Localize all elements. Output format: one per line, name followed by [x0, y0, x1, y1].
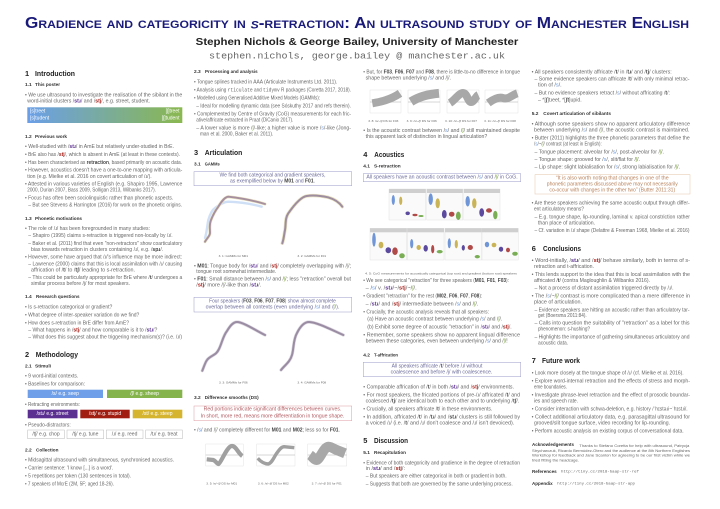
captions: figures 1 and 2: 3. 2: GAMMs for F01 — [297, 254, 326, 258]
subsection: 1.2 Previous work: • Focus has often been sociolinguistic rather than phonetic aspects. — [25, 195, 173, 201]
heading: Methodology: Methodology — [36, 350, 79, 359]
captions: figures 5 to 7: 3. 6: /s/~/ʃ/ DS for M02 — [258, 481, 289, 485]
text: affrication discussion: – *[ʃ]tɹeet, *[ʃt]upid. — [538, 97, 582, 103]
text: articulatory means: – Cf. variation in /ɹ/ shape (Delattre & Freeman 1968, Mielke et al. 2016) — [534, 228, 690, 234]
chart: GAMMs for F01 — [282, 196, 342, 243]
text: s-retraction findings: • Remember, some speakers show no apparent lingual difference — [363, 332, 520, 338]
text: conclusions: – Highlights the importance of gathering simultaneous articulatory and — [534, 334, 690, 340]
callout: Butter quotation — [535, 175, 690, 194]
subsection heading: 3.1 GAMMs — [194, 162, 220, 168]
section: 7 Future work — [532, 356, 690, 434]
text: conclusions — [532, 258, 690, 346]
text: conclusions: get (Boersma 2011:84). — [538, 313, 587, 319]
subsection heading: 3.2 Difference smooths — [194, 395, 259, 401]
authors: Stephen Nichols & George Bailey, University of Manchester — [196, 36, 518, 48]
text: articulatory means: ent articulatory means? — [534, 207, 584, 213]
heading: Conclusions — [532, 244, 581, 253]
subsection: 2.3 Processing and analysis: – A lower value is more / ʃ/-like; a higher value is more / s/-like (Jong- — [196, 125, 351, 131]
gradient box: street and student variants: [s]tudent — [30, 115, 50, 121]
text: conclusions: • The /s/~/ʃ/ contrast is more complicated than a mere difference in — [532, 294, 690, 300]
callout: four speakers overlap: Four speakers (F03, F06, F07, F08) show almost complete — [209, 298, 336, 304]
text: future work: • Investigate phrase-level retraction and the effect of prosodic boundar- — [532, 392, 690, 398]
captions: figures 1 and 2: 3. 1: GAMMs for M01 — [219, 254, 248, 258]
text: M01 and F01 observations: • F01: Small distance between / s/ and /ʃ/; less "retraction" overall but — [194, 276, 352, 282]
text: retracting environments: • Retracting environments: — [25, 402, 80, 408]
text: little difference for four speakers: • But, for F03, F06, F07 and F08, there is little-to-no difference in tongue — [363, 69, 520, 75]
text: affrication discussion: – But no evidence speakers retract / s/ without affricating / t/: — [534, 91, 670, 97]
title: Gradience and categoricity in s-retraction: An ultrasound study of Manchester English — [25, 15, 689, 32]
subsection: 1.4 Research questions: • Is s-retraction categorical or gradient? — [25, 304, 113, 310]
callout: categorical and gradient speakers — [194, 172, 352, 186]
subsection: 5.2 Covert articulation of sibilants: – Lip shape: slight labialisation for / s/, strong labialisation for / ʃ/. — [534, 165, 680, 171]
subsection: 5.2 Covert articulation of sibilants: • Although some speakers show no apparent articulatory difference — [532, 121, 690, 127]
text: t-affrication findings — [363, 384, 521, 426]
section: 4 Acoustics — [363, 150, 521, 426]
text: articulatory means: – E.g. tongue shape, lip-rounding, laminal v. apical constriction rather — [534, 214, 690, 220]
chart: difference smooth F01 — [308, 444, 347, 466]
text: s-retraction findings: (b) Exhibit some degree of acoustic "retraction" in / stɹ/ and /stj/. — [367, 325, 512, 331]
appendix: http://tiny.cc/2018-baap-str-app — [557, 481, 636, 486]
text: conclusions: • This lends support to the idea that this is local assimilation with the — [532, 272, 690, 278]
subsection: 1.1 This poster: word-initial clusters / stɹ/ and /stj/, e.g. street, student. — [27, 99, 150, 105]
captions: figures 1 and 2 — [219, 254, 326, 258]
chart: difference smooth M02 — [257, 444, 295, 466]
text: affrication discussion: tion of / s/. — [538, 83, 562, 89]
subsection: 1.3 Phonetic motivations: similar process before /j/ for most speakers. — [31, 281, 130, 287]
text: little difference for four speakers — [363, 69, 520, 81]
retracting environment boxes: /st/ e.g. steep — [142, 411, 173, 417]
text: M01 and F01 observations: /stj/ more / ʃ/-like than / stɹ/. — [196, 283, 261, 289]
subsection heading: 4.2 T-affrication: T-affrication — [374, 352, 398, 358]
heading: Methodology: 2 — [25, 350, 29, 359]
text: articulatory means: • Are these speakers achieving the same acoustic output through differ- — [532, 201, 690, 207]
chart: difference smooth M01 — [206, 444, 243, 466]
subsection: 2.2 Collection: Collection — [36, 448, 59, 454]
text: acoustic contrast question: • Is the acoustic contrast between / s/ and /ʃ/ still maintained despite — [363, 128, 520, 134]
heading: Discussion — [363, 436, 408, 445]
subsection: 1.1 This poster: This poster — [35, 82, 60, 88]
subsection: 1.2 Previous work: • BrE also has /stj/, which is absent in AmE (at least in these contexts). — [25, 152, 180, 158]
text: conclusions: – Calls into question the suitability of "retraction" as a label for this — [534, 321, 690, 327]
subsection: 1.4 Research questions: • How does s-retraction in BrE differ from AmE? — [25, 320, 129, 326]
section: 6 Conclusions — [532, 244, 690, 346]
text: future work: • Consider interaction with schwa-deletion, e.g. history /ˈhɪstəɹi~ˈhɪstɹi/. — [532, 406, 688, 412]
subsection: 1.3 Phonetic motivations: • The role of /ɹ/ has been foregrounded in many studies: — [25, 226, 150, 232]
appendix — [532, 481, 636, 487]
subsection: 1.3 Phonetic motivations: – Baker et al. (2011) find that even "non-retractors" show coarticulatory — [28, 241, 183, 247]
text: s-retraction findings: – /s/ v. / stɹ/~/stj/~/ʃ/. — [366, 285, 417, 291]
text: s-retraction findings: • Crucially, the acoustic analysis reveals that all speakers: — [363, 309, 489, 315]
callout: Butter quotation: phonetic parameters discussed above may not necessarily — [547, 182, 678, 188]
section: 2 Methodology — [25, 69, 351, 487]
subsection: 1.4 Research questions: Research questions — [36, 294, 80, 300]
heading: Discussion: 5 — [363, 436, 367, 445]
subsection: 1.4 Research questions: • What degree of inter-speaker variation do we find? — [25, 312, 140, 318]
text: t-affrication findings: • Comparable affrication of / t/ in both /stɹ/ and /stj/ environments. — [363, 384, 514, 390]
subsection: 5.2 Covert articulation of sibilants: Covert articulation of sibilants — [543, 111, 611, 117]
subsection: 2.3 Processing and analysis: • Tongue splines tracked in AAA (Articulate Instruments Ltd. 2011). — [194, 79, 337, 85]
baseline boxes: /ʃ/ e.g. sheep — [130, 391, 159, 397]
subsection: 5.2 Covert articulation of sibilants: 5.2 — [532, 111, 539, 117]
references: http://tiny.cc/2018-baap-str-ref — [561, 469, 640, 474]
subsection: 2.3 Processing and analysis — [194, 69, 351, 137]
callout: affrication: coalescence and before /j/ with coalescence. — [391, 369, 492, 375]
subsection heading: 3.2 Difference smooths: Difference smooths (DS) — [205, 395, 259, 401]
callout: four speakers overlap: overlap between all contexts (even underlying / s/ and /ʃ/). — [206, 304, 339, 310]
subsection: 1.4 Research questions: – What happens in /stj/ and how comparable is it to /stɹ/? — [28, 327, 158, 333]
subsection: 1.3 Phonetic motivations: – This could be particularly appropriate for BrE where /t/ undergoes a — [28, 275, 183, 281]
pseudo-distractor boxes: /tj/ e.g. tune — [72, 431, 99, 437]
captions: figures 8 to 11: 3. 9: /s/~/ʃ/ DS for F06 — [407, 119, 437, 123]
subsection: 2.3 Processing and analysis: 2.3 — [194, 69, 201, 75]
text: conclusions: – Not a process of distant assimilation triggered directly by /ɹ/. — [534, 285, 674, 291]
subsection: 2.3 Processing and analysis: • Analysis using rticulate and tidymv R packages (Coretta 2017, 2018). — [194, 87, 351, 93]
subsection: 5.1 Recapitulation: – Suggests that both are governed by the same underlying process. — [366, 481, 513, 487]
heading: Articulation: 3 — [194, 148, 198, 157]
subsection: 1.2 Previous work — [25, 134, 183, 209]
subsection heading: 3.1 GAMMs: GAMMs — [205, 162, 220, 168]
text: t-affrication findings: • In addition, affricated / t/ in /tɹ/ and /stɹ/ clusters is still followed by — [363, 414, 521, 420]
appendix: Appendix — [532, 481, 553, 487]
text: articulatory means: than place of articulation. — [538, 220, 595, 226]
subsection heading: 4.2 T-affrication: 4.2 — [363, 352, 370, 358]
subsection: 2.2 Collection: • Carrier sentence: 'I know [...] is a word'. — [25, 465, 113, 471]
text: s-retraction findings: (a) Have an acoustic contrast between underlying / s/ and /ʃ/. — [367, 317, 502, 323]
gradient box: street and student variants: [ʃ]tudent — [162, 115, 180, 121]
text: future work: • Explore word-internal retraction and the effects of stress and morph- — [532, 378, 690, 384]
subsection: 2.2 Collection: 2.2 — [25, 448, 32, 454]
acknowledgements: Thanks to Stefano Coretta for help with ultrasound, Patrycja — [579, 443, 690, 448]
subsection: 2.2 Collection: • 7 speakers of McrE (2M, 5F; aged 18-26). — [25, 481, 114, 487]
chart: difference smooth F08 — [485, 90, 518, 113]
chart: CoG violin plots, gradient speakers — [370, 228, 518, 260]
subsection: 1.3 Phonetic motivations: – Shapiro (1995) claims s-retraction is triggered non-locally by /ɹ/. — [28, 233, 173, 239]
baseline boxes — [28, 390, 182, 398]
subsection: 5.1 Recapitulation: – But speakers are either categorical in both or gradient in both. — [366, 474, 507, 480]
captions: figures 8 to 11 — [368, 119, 516, 123]
text: t-affrication findings: coalesced /tj/ are identical both to each other and to underlying / tʃ/. — [366, 398, 519, 404]
text: conclusions: retraction and t-affrication. — [534, 264, 594, 270]
captions: figures 3 and 4: 3. 4: GAMMs for F08 — [297, 381, 326, 385]
subsection: 2.3 Processing and analysis: • Modelled using Generalised Additive Mixed Models (GAMMs): — [194, 95, 320, 101]
text: t-affrication findings: a voiced /ɹ/ (i.e. / t/ and /ɹ/ don't coalesce and /ɹ/ isn't devoiced). — [366, 420, 514, 426]
callout: Butter quotation: co-occur with changes in the other two” (Butter 2011:31) — [549, 187, 675, 193]
baseline boxes: /s/ e.g. seep — [52, 391, 79, 397]
subsection: 5.1 Recapitulation: 5.1 — [363, 450, 370, 456]
chart: difference smooth F06 — [408, 90, 440, 113]
subsection heading: 4.1 S-retraction: 4.1 — [363, 164, 370, 170]
heading: Acoustics: 4 — [363, 150, 368, 159]
callout: red portions — [194, 406, 352, 421]
acknowledgements: tried fitting the headcage. — [532, 458, 579, 462]
text: s-retraction findings: • We see categorical "retraction" for three speakers (M01, F01, F03): — [363, 278, 509, 284]
captions: figures 8 to 11: 3. 10: /s/~/ʃ/ DS for F07 — [445, 119, 477, 123]
gradient box: street and student variants: [s]treet — [30, 108, 46, 114]
text: acoustic contrast question: this apparent lack of distinction in lingual articulation? — [366, 134, 488, 140]
subsection: 2.2 Collection: • Midsagittal ultrasound with simultaneous, synchronised acoustics. — [25, 458, 174, 464]
subsection: 1.3 Phonetic motivations: bias towards retraction in clusters containing /ɹ/, e.g. / spɹ/. — [31, 247, 163, 253]
subsection: 2.1 Stimuli: • 9 word-initial contexts. — [25, 374, 78, 380]
contact email: stephen.nichols, george.bailey @ manchester.ac.uk — [209, 52, 505, 62]
pseudo-distractor boxes: /tʃ/ e.g. chop — [32, 431, 60, 437]
subsection: 1.1 This poster — [25, 82, 183, 105]
text: future work: • Collect additional articulatory data, e.g. parasagittal ultrasound for — [532, 414, 690, 420]
subsection: 5.1 Recapitulation — [363, 450, 520, 487]
subsection heading: 4.1 S-retraction: S-retraction — [374, 164, 401, 170]
captions: figures 3 and 4 — [219, 381, 326, 385]
subsection: 1.3 Phonetic motivations: 1.3 — [25, 216, 32, 222]
heading: Introduction: Introduction — [35, 69, 75, 78]
captions: figures 3 and 4: 3. 3: GAMMs for F06 — [219, 381, 248, 385]
text: M01 and F01 observations: • M01: Tongue body for / stɹ/ and /stj/ completely overlapping with / ʃ/; — [194, 263, 351, 269]
subsection: 5.1 Recapitulation: Recapitulation — [374, 450, 406, 456]
text: affrication discussion: • All speakers consistently affricate / t/ in /tɹ/ and /tj/ clusters: — [532, 69, 672, 75]
subsection: 1.2 Previous work: 2000, Durian 2007, Bass 2009, Solligan 2013, Wilbanks 2017). — [27, 188, 156, 194]
subsection: 2.2 Collection — [25, 448, 174, 487]
text: t-affrication findings: • Crucially, all speakers affricate /t/ in these environments. — [363, 406, 492, 412]
subsection: 1.2 Previous work: • Well-studied with /stɹ/ in AmE but relatively under-studied in BrE. — [25, 144, 174, 150]
callout: affrication: All speakers affricate /t/ before /ɹ/ without — [392, 363, 483, 369]
caption: CoG figure: 4. 5: CoG measurements for acoustically categorical (top row) and gradient (bottom row) speakers — [365, 271, 517, 275]
subsection: 1.2 Previous work: tion (e.g. Mielke et al. 2016 on covert articulation of /ɹ/). — [27, 174, 152, 180]
text: pseudo-distractors: • Pseudo-distractors: — [25, 422, 71, 428]
subsection: 5.2 Covert articulation of sibilants: /s/~/ʃ/ contrast (at least in English): — [534, 142, 602, 148]
subsection: 5.2 Covert articulation of sibilants: – Tongue placement: alveolar for / s/, post-alveolar for / ʃ/. — [534, 149, 664, 155]
gradient box: street and student variants: [ʃ]treet — [166, 108, 180, 114]
acknowledgements: Acknowledgements — [532, 442, 574, 448]
callout: Butter quotation: “It is also worth noting that changes in one of the — [556, 176, 669, 182]
text: affrication discussion — [532, 69, 690, 103]
text: future work: grooved/slit tongue surface, video recording for lip-rounding. — [534, 420, 670, 426]
subsection: 1.2 Previous work: Previous work — [35, 134, 67, 140]
subsection: 1.4 Research questions: – What does this suggest about the triggering mechanism(s)? (i.e. /ɹ/) — [28, 335, 182, 341]
subsection: 5.2 Covert articulation of sibilants: • Butter (2011) highlights the three phonetic parameters that define the — [532, 136, 690, 142]
text: conclusions: place of articulation. — [534, 300, 582, 306]
subsection: 1.4 Research questions — [25, 294, 182, 341]
captions: figures 8 to 11: 3. 8: /s/~/ʃ/ DS for F03 — [368, 119, 399, 123]
text: conclusions: phenomenon: s-hushing? — [538, 327, 590, 333]
acknowledgements — [532, 442, 690, 462]
heading: Acoustics — [363, 150, 404, 159]
heading: Introduction: 1 — [25, 69, 29, 78]
callout: acoustic contrast in CoG: All speakers have an acoustic contrast between / s/ and /ʃ/ in CoG. — [366, 174, 518, 180]
acknowledgements: Workshop for feedback and Jane Scanlon for agreeing to be our first victim while we — [532, 452, 690, 458]
chart: CoG violin plots, categorical speakers — [389, 189, 500, 220]
text: articulatory means — [532, 201, 690, 234]
text: affrication discussion: – Some evidence speakers can affricate / t/ with only minimal retrac- — [534, 77, 690, 83]
subsection: 1.2 Previous work: 1.2 — [25, 134, 32, 140]
subsection: 2.1 Stimuli: Stimuli — [35, 364, 51, 370]
text: conclusions: affricated /t/ (contra Magloughlin & Wilbanks 2016). — [534, 278, 650, 284]
text: future work: • Look more closely at the tongue shape of /ɹ/ (cf. Mielke et al. 2016). — [532, 370, 684, 376]
captions: figures 8 to 11: 3. 11: /s/~/ʃ/ DS for F08 — [484, 119, 516, 123]
subsection: 2.1 Stimuli — [25, 364, 85, 388]
retracting environment boxes: /stj/ e.g. stupid — [89, 411, 121, 417]
chart: GAMMs for F06 — [202, 322, 265, 371]
text: s-retraction findings: – /stɹ/ and /stj/ intermediate between / s/ and /ʃ/. — [366, 301, 478, 307]
subsection: 1.2 Previous work: • Has been characterised as retraction, based primarily on acoustic data. — [25, 160, 182, 166]
subsection: 2.2 Collection: • 5 repetitions per token (130 sentences in total). — [25, 474, 131, 480]
heading: Future work: Future work — [542, 356, 581, 365]
subsection: 1.2 Previous work: – But see Stevens & Harrington (2016) for work on the phonetic origins. — [28, 203, 182, 209]
captions: figures 5 to 7: 3. 5: /s/~/ʃ/ DS for M01 — [206, 481, 237, 485]
subsection: 1.1 This poster: • We use ultrasound to investigate the realisation of the sibilant in the — [25, 92, 183, 98]
section: 5 Discussion — [363, 69, 690, 487]
heading: Future work: 7 — [532, 356, 536, 365]
chart: difference smooth F03 — [370, 90, 401, 113]
subsection heading: 4.1 S-retraction — [363, 164, 401, 170]
heading: Acoustics: Acoustics — [374, 150, 404, 159]
pseudo-distractor boxes: /tɹ/ e.g. treat — [151, 431, 178, 437]
chart: GAMMs for M01 — [205, 197, 265, 242]
subsection: 1.2 Previous work: • Attested in various varieties of English (e.g. Shapiro 1995, Lawrence — [25, 182, 183, 188]
subsection: 2.3 Processing and analysis: • Complemented by Centre of Gravity (CoG) measurements for each fric- — [194, 112, 351, 118]
references — [532, 469, 640, 475]
section: 3 Articulation — [194, 69, 520, 485]
chart: difference smooth F07 — [447, 90, 479, 113]
subsection: 1.3 Phonetic motivations: Phonetic motivations — [35, 216, 82, 222]
text: t-affrication findings: • For most speakers, the fricated portions of pre-/ɹ/ affricated / t/ and — [363, 392, 520, 398]
text: conclusions: acoustic data. — [538, 340, 568, 346]
callout: red portions: In short, more red, means more differentiation in tongue shape. — [201, 414, 344, 420]
subsection: 2.3 Processing and analysis: man et al. 2000, Baker et al. 2011). — [200, 131, 273, 137]
text: conclusions: – Evidence speakers are hitting an acoustic rather than articulatory tar- — [534, 307, 690, 313]
subsection: 1.3 Phonetic motivations: – Lawrence (2000) claims that this is local assimilation with /ɹ/ causing — [28, 262, 183, 268]
retracting environment boxes — [28, 410, 182, 418]
acknowledgements: Strycharczuk, Ricardo Bermúdez-Otero and the audience at the 8th Northern Englishes — [532, 448, 690, 453]
subsection: 1.3 Phonetic motivations — [25, 216, 183, 287]
heading: Articulation: Articulation — [205, 148, 243, 157]
subsection heading: 4.2 T-affrication — [363, 352, 398, 358]
callout: categorical and gradient speakers: as exemplified below by M01 and F01. — [230, 178, 315, 184]
callout: red portions: Red portions indicate significant differences between curves. — [204, 406, 341, 412]
section: 1 Introduction — [25, 69, 183, 341]
captions: figures 5 to 7: 3. 7: /s/~/ʃ/ DS for F01 — [312, 481, 342, 485]
text: little difference for four speakers: shape between underlying / s/ and /ʃ/. — [366, 75, 451, 81]
subsection: 2.3 Processing and analysis: ative/affricate extracted in Praat (DiCanio 2017). — [196, 118, 293, 124]
text: s-retraction findings — [363, 278, 520, 345]
text: M01 and F01 observations: tongue root somewhat intermediate. — [196, 269, 276, 275]
text: s-retraction findings: • Gradient "retraction" for the rest (M02, F06, F07, F08): — [363, 293, 482, 299]
subsection: 1.2 Previous work: • However, acoustics doesn't have a one-to-one mapping with articula- — [25, 168, 183, 174]
retracting environment boxes: /stɹ/ e.g. street — [37, 411, 69, 417]
subsection: 1.4 Research questions: 1.4 — [25, 294, 32, 300]
subsection: 5.2 Covert articulation of sibilants: between underlying / s/ and /ʃ/, the acoustic contrast is maintained. — [534, 128, 689, 134]
callout: four speakers overlap — [194, 297, 352, 312]
callout: affrication — [363, 362, 521, 377]
text: acoustic contrast question — [363, 128, 520, 140]
text: s-retraction findings: between these categories, even between underlying / s/ and /ʃ/! — [366, 339, 508, 345]
subsection heading: 3.2 Difference smooths: 3.2 — [194, 395, 201, 401]
text: future work: ies and speech rate. — [534, 398, 578, 404]
subsection: 1.1 This poster: 1.1 — [25, 82, 32, 88]
references: References — [532, 469, 557, 475]
subsection: 5.2 Covert articulation of sibilants: – Tongue shape: grooved for / s/, slit/flat for /ʃ/. — [534, 157, 640, 163]
subsection: 2.3 Processing and analysis: – Ideal for modelling dynamic data (see Sóskuthy 2017 and refs therein). — [196, 103, 351, 109]
subsection: 2.3 Processing and analysis: Processing and analysis — [205, 69, 258, 75]
pseudo-distractor boxes: /ɹ/ e.g. reed — [112, 431, 138, 437]
subsection: 5.1 Recapitulation: • Evidence of both categoricity and gradience in the degree of retraction — [363, 460, 520, 466]
text: future work — [532, 370, 690, 434]
text: conclusions: • Word-initially, / stɹ/ and / stj/ behave similarly, both in terms of s- — [532, 258, 690, 264]
heading: Conclusions: 6 — [532, 244, 536, 253]
text: M01 and F01 observations — [194, 263, 352, 289]
subsection: 2.1 Stimuli: 2.1 — [25, 364, 32, 370]
subsection: 5.1 Recapitulation: in /stɹ/ and / stj/: — [366, 466, 405, 472]
text: difference smooth result: • /s/ and /ʃ/ completely different for M01 and M02; less so for F01. — [194, 427, 340, 433]
gradient box: street and student variants — [27, 107, 182, 123]
captions: figures 5 to 7 — [206, 481, 342, 485]
heading: Discussion: Discussion — [374, 436, 408, 445]
subsection: 1.3 Phonetic motivations: • However, some have argued that /ɹ/'s influence may be more indirect: — [25, 255, 182, 261]
text: future work: • Perform acoustic analysis on existing corpus of conversational data. — [532, 428, 684, 434]
subsection heading: 3.1 GAMMs: 3.1 — [194, 162, 201, 168]
callout: categorical and gradient speakers: We find both categorical and gradient speakers, — [220, 172, 326, 178]
subsection: 1.3 Phonetic motivations: affrication of / t/ to /tʃ/ leading to s-retraction. — [31, 268, 135, 274]
text: future work: eme boundaries. — [534, 384, 567, 390]
pseudo-distractor boxes — [28, 430, 182, 439]
subsection: 2.1 Stimuli: • Baselines for comparison: — [25, 382, 85, 388]
chart: GAMMs for F08 — [281, 322, 343, 370]
subsection: 5.2 Covert articulation of sibilants — [532, 111, 690, 171]
heading: Conclusions: Conclusions — [543, 244, 581, 253]
